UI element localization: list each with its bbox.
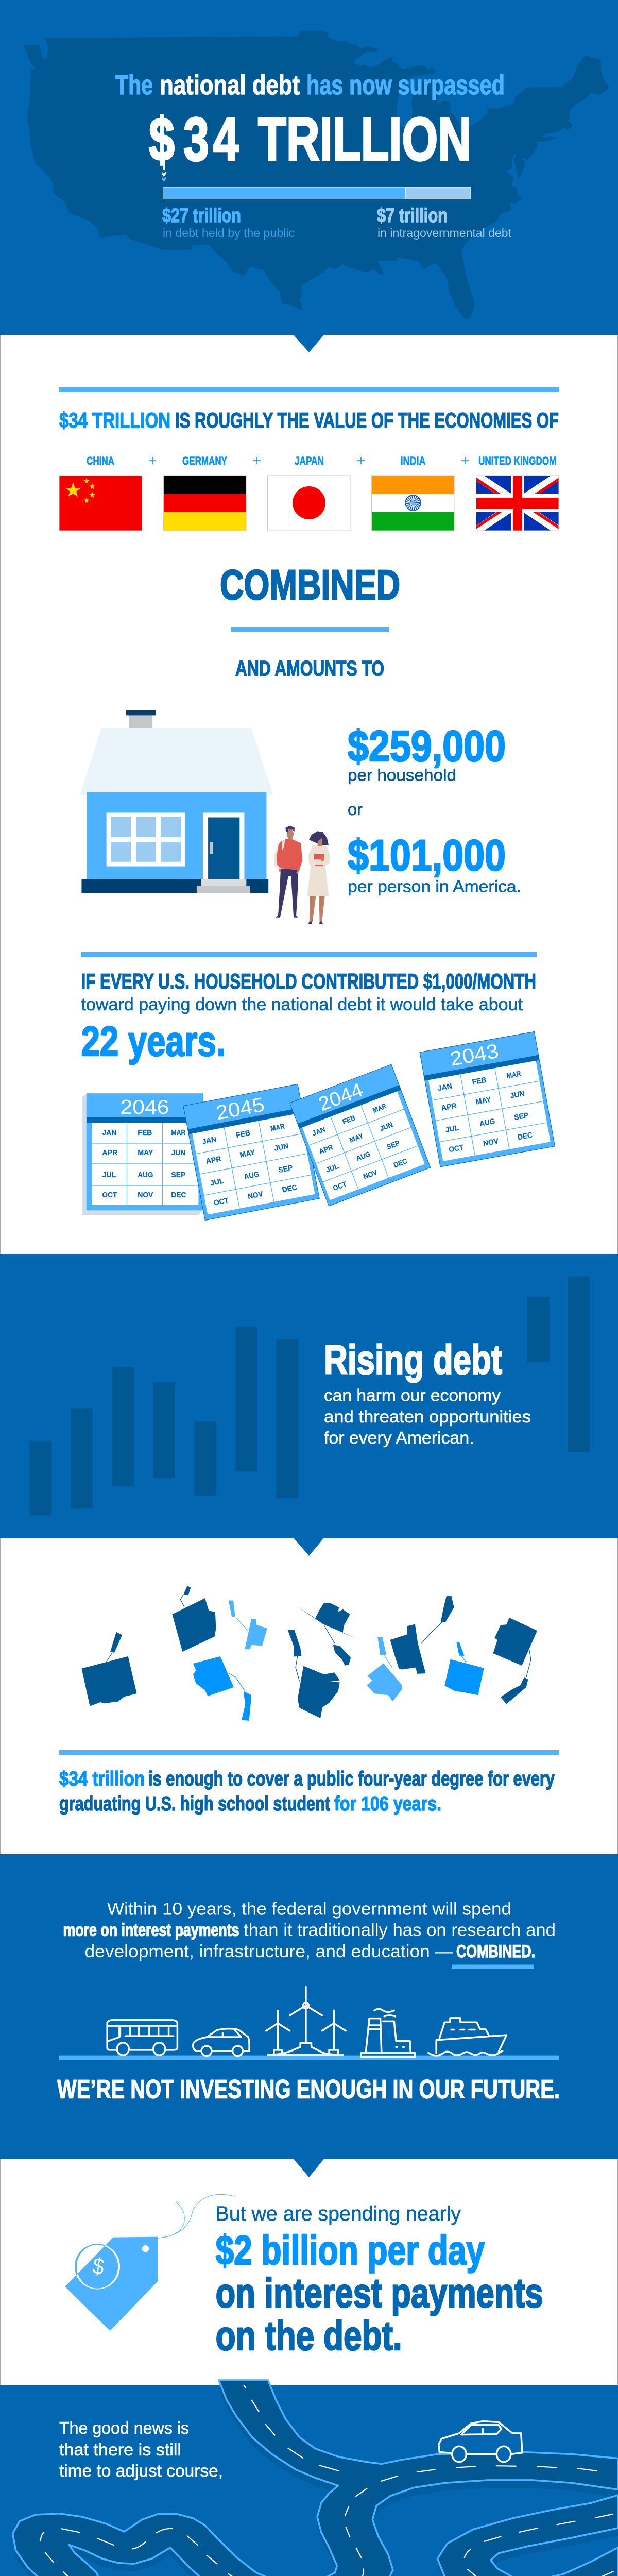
calendar 2043: AUG <box>479 1117 495 1128</box>
label: $27 trillion <box>162 205 295 240</box>
big number: TRILLION <box>258 106 471 174</box>
chevrons under the dollar sign <box>162 159 166 182</box>
calendar 2045: JUN <box>273 1142 289 1153</box>
panel: economies comparison <box>59 387 561 680</box>
label: $27 trillion: in debt held by the public <box>163 226 295 240</box>
calendar 2044 <box>289 1064 431 1206</box>
calendar 2045: SEP <box>278 1164 294 1175</box>
text: rising debt <box>324 1336 531 1447</box>
text block: monthly contribution: 22 years. <box>81 1018 226 1065</box>
calendar 2043: FEB <box>472 1076 487 1087</box>
icon: price tag <box>65 2194 235 2331</box>
calendar 2046: JUL <box>102 1171 116 1179</box>
text block: four-year degree: graduating U.S. high school student <box>59 1793 330 1815</box>
stat: per person: per person in America. <box>348 877 521 895</box>
calendar 2043: JUL <box>444 1124 460 1134</box>
text: rising debt: and threaten opportunities <box>324 1407 531 1426</box>
icon: factory <box>361 2009 415 2057</box>
illustration: winding road <box>0 2380 618 2576</box>
label: $7 trillion <box>377 205 512 240</box>
headline: national debt <box>160 70 300 100</box>
label: $27 trillion: $27 trillion <box>162 205 241 227</box>
calendar 2046: FEB <box>138 1129 152 1137</box>
calendar 2044: AUG <box>355 1149 371 1162</box>
stat: per household <box>348 722 506 785</box>
road shadow <box>0 2388 618 2576</box>
text block: four-year degree: $34 trillion <box>59 1768 145 1790</box>
text: interest payments: more on interest payments <box>63 1921 239 1940</box>
rising bars <box>29 1277 590 1515</box>
text: rising debt: Rising debt <box>324 1336 502 1383</box>
text: interest payments: COMBINED. <box>456 1942 535 1961</box>
stat: per person: $101,000 <box>348 831 506 879</box>
calendar 2044: FEB <box>341 1113 356 1126</box>
stat: per household: per household <box>348 766 456 785</box>
calendar 2046: SEP <box>171 1171 186 1179</box>
calendar 2043: JAN <box>437 1082 453 1093</box>
text: interest payments: development, infrastructure, and education — <box>84 1942 453 1961</box>
calendar 2046: MAY <box>138 1149 153 1157</box>
calendar 2046 <box>82 1094 203 1215</box>
calendar 2044: JUN <box>379 1120 394 1132</box>
country labels <box>87 454 556 467</box>
text: interest payments: Within 10 years, the federal government will spend <box>107 1900 511 1919</box>
country labels: GERMANY <box>182 454 227 467</box>
calendar 2044: DEC <box>392 1157 408 1169</box>
calendar 2045 <box>183 1084 319 1221</box>
calendar 2046: JAN <box>102 1129 116 1137</box>
calendar 2045: JAN <box>201 1136 217 1146</box>
calendar 2045: JUL <box>210 1177 225 1188</box>
calendar 2045: 2045 <box>214 1093 266 1125</box>
text: rising debt: for every American. <box>324 1428 474 1447</box>
label: $7 trillion: in intragovernmental debt <box>377 226 512 240</box>
calendar 2043: MAR <box>506 1070 522 1080</box>
calendar 2044: 2044 <box>316 1079 366 1115</box>
calendar 2046: APR <box>102 1149 118 1157</box>
headline: The <box>115 70 153 100</box>
calendar 2046: MAR <box>171 1129 186 1137</box>
calendar 2045: NOV <box>247 1190 264 1201</box>
word: combined: COMBINED <box>220 562 400 608</box>
flag: United Kingdom <box>473 476 561 531</box>
flag: Japan <box>268 476 350 531</box>
icon: car <box>193 2029 249 2056</box>
calendar 2045: FEB <box>235 1129 251 1140</box>
big number: 34 <box>183 106 239 174</box>
calendar 2045: DEC <box>282 1183 298 1194</box>
road surface <box>0 2380 618 2576</box>
text: good news: that there is still <box>59 2441 181 2460</box>
heading: economies <box>59 408 559 432</box>
calendars <box>82 1031 555 1221</box>
calendar 2043: MAY <box>475 1096 492 1107</box>
text: interest payments <box>63 1900 556 1961</box>
calendar 2043: NOV <box>483 1137 500 1148</box>
icon: ship <box>428 2018 506 2056</box>
text: interest payments: than it traditionally has on research and <box>244 1921 556 1940</box>
panel: not investing enough <box>0 1854 618 2177</box>
calendar 2043: JUN <box>509 1090 525 1100</box>
calendar 2043: OCT <box>448 1143 465 1154</box>
calendar 2044: MAY <box>348 1131 365 1144</box>
text block: $2 billion per day: on interest payments <box>216 2270 543 2316</box>
icon: bus <box>107 2020 177 2055</box>
road lane dashes <box>0 2385 614 2576</box>
text block: monthly contribution <box>81 969 536 1065</box>
text block: $2 billion per day: But we are spending nearly <box>216 2202 461 2225</box>
calendar 2043: SEP <box>513 1111 529 1122</box>
icon: wind turbines <box>266 1987 346 2055</box>
heading: economies: $34 TRILLION <box>59 408 170 432</box>
illustration: house <box>80 710 273 893</box>
calendar 2046: 2046 <box>120 1096 169 1118</box>
panel: rising debt <box>0 1254 618 1556</box>
country labels: CHINA <box>87 454 114 467</box>
stacked bar: debt split <box>163 187 471 199</box>
calendar 2044: OCT <box>332 1180 348 1192</box>
headline: has now surpassed <box>306 70 505 100</box>
calendar 2043: APR <box>441 1102 457 1113</box>
calendar 2043: 2043 <box>449 1040 501 1071</box>
calendar 2046: OCT <box>102 1191 117 1199</box>
calendar 2046: AUG <box>138 1171 153 1179</box>
big number: $ <box>149 106 175 174</box>
calendar 2046: DEC <box>171 1191 186 1199</box>
calendar 2045: MAR <box>270 1122 286 1133</box>
calendar 2044: APR <box>318 1143 334 1156</box>
woman <box>307 831 330 924</box>
illustration: graduation caps <box>81 1586 537 1721</box>
flag: China <box>59 476 142 531</box>
icon: car on road <box>439 2421 522 2462</box>
calendar 2046: JUN <box>171 1149 185 1157</box>
text block: $2 billion per day: $2 billion per day <box>216 2227 485 2273</box>
calendar 2045: AUG <box>243 1170 260 1181</box>
text: rising debt: can harm our economy <box>324 1386 501 1405</box>
calendar 2044: SEP <box>385 1139 401 1151</box>
text: good news <box>59 2419 223 2481</box>
text block: four-year degree: for 106 years. <box>334 1793 441 1815</box>
calendar 2043 <box>420 1031 555 1167</box>
text: good news: The good news is <box>59 2419 189 2438</box>
text: or: or <box>348 800 363 819</box>
text: good news: time to adjust course, <box>59 2462 223 2481</box>
calendar 2043: DEC <box>517 1131 534 1142</box>
headline <box>115 70 505 100</box>
text block: $2 billion per day: on the debt. <box>216 2313 402 2359</box>
calendar 2044: NOV <box>362 1168 379 1181</box>
icons: infrastructure <box>107 1987 506 2057</box>
icon: price tag: $ <box>91 2253 106 2280</box>
calendar 2045: APR <box>205 1155 222 1166</box>
country labels: JAPAN <box>295 454 324 467</box>
calendar 2046: NOV <box>138 1191 153 1199</box>
text block: monthly contribution: toward paying down the national debt it would take about <box>81 995 523 1014</box>
illustration: couple <box>274 826 330 924</box>
country labels: UNITED KINGDOM <box>478 454 556 467</box>
calendar 2044: JUL <box>325 1162 340 1174</box>
text block: $2 billion per day <box>216 2202 543 2359</box>
text block: four-year degree <box>59 1768 555 1815</box>
map of the United States <box>24 31 610 319</box>
calendar 2045: OCT <box>213 1196 230 1208</box>
country labels: INDIA <box>401 454 426 467</box>
panel: hero national debt <box>0 0 618 352</box>
calendar 2044: JAN <box>311 1125 327 1138</box>
label: $7 trillion: $7 trillion <box>377 205 448 227</box>
text: and amounts to: AND AMOUNTS TO <box>235 656 384 680</box>
flag: Germany <box>164 476 246 531</box>
stat: per household: $259,000 <box>348 722 506 770</box>
man <box>274 826 302 918</box>
calendar 2044: MAR <box>371 1101 387 1114</box>
calendar 2045: MAY <box>239 1148 256 1160</box>
panel: good news road <box>0 2380 618 2576</box>
flag: India <box>372 476 454 531</box>
